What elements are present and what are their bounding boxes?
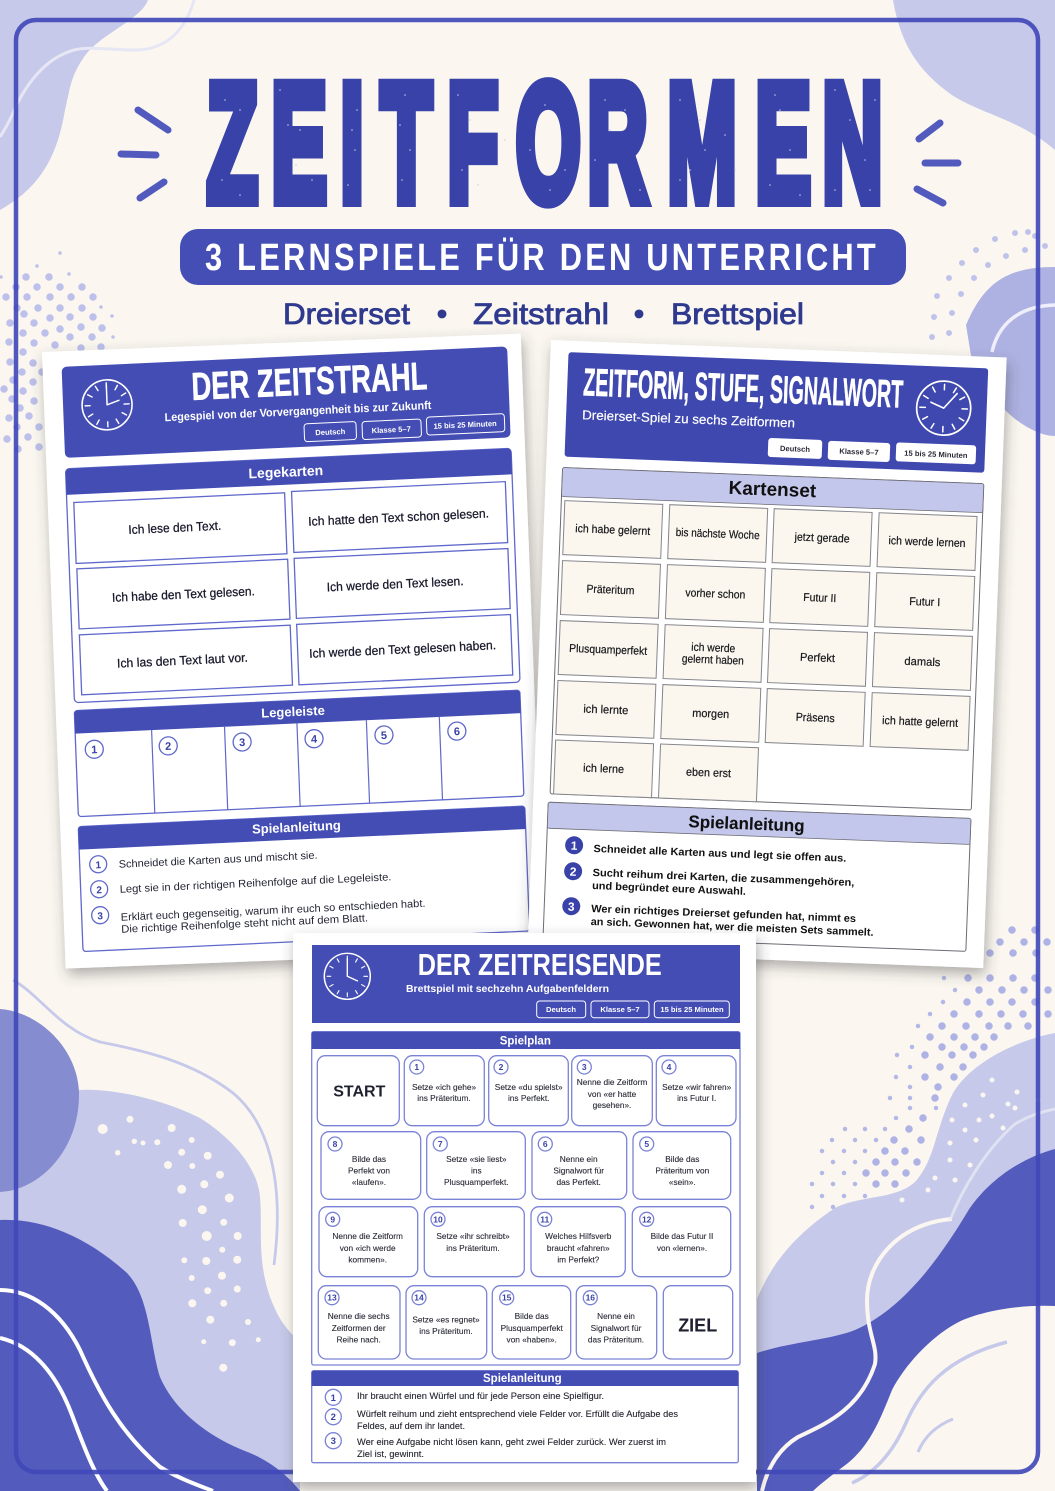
field: START: START — [333, 1084, 386, 1100]
field 4: Setze «wir fahren» — [662, 1082, 732, 1092]
field 5: «sein». — [669, 1177, 696, 1187]
instructions — [561, 836, 877, 939]
tags — [304, 414, 505, 442]
tags: 15 bis 25 Minuten — [904, 449, 968, 460]
field 11: braucht «fahren» — [547, 1243, 610, 1253]
field 12: von «lernen». — [657, 1243, 707, 1253]
field 6: Nenne ein — [560, 1154, 598, 1164]
game list: • — [437, 298, 447, 331]
game list — [283, 298, 804, 331]
field 11: Welches Hilfsverb — [545, 1231, 612, 1241]
blob: top left — [0, 0, 148, 210]
game list: • — [634, 298, 644, 331]
instructions: 3 — [331, 1436, 336, 1447]
instructions — [89, 841, 426, 937]
field 6: Signalwort für — [553, 1166, 604, 1176]
dots: top left small — [1, 253, 113, 337]
field 8 — [321, 1132, 421, 1199]
card: Ich las — [79, 625, 292, 695]
card: Perfekt: Perfekt — [800, 652, 836, 665]
instructions: Schneidet die Karten aus und mischt sie. — [119, 850, 318, 871]
field 16: Signalwort für — [591, 1323, 642, 1333]
title: ZEITFORMEN — [207, 49, 882, 235]
field 14 — [406, 1286, 487, 1359]
field 14: Setze «es regnet» — [412, 1314, 480, 1324]
dots: lower right large — [866, 930, 1048, 1184]
card: ich lernte — [556, 681, 656, 738]
card: Ich hatte: Ich hatte den Text schon gelesen. — [308, 506, 489, 529]
card: ich werde gelernt haben: gelernt haben — [682, 653, 744, 668]
sparks left — [121, 110, 168, 198]
line: lower left white two — [0, 1338, 107, 1491]
panel: Spielplan — [312, 1032, 740, 1365]
instructions: Wer ein richtiges Dreierset gefunden hat, nimmt es — [591, 903, 856, 925]
instructions: Erklärt euch gegenseitig, warum ihr euch so entschieden habt. — [121, 898, 426, 924]
field 13 — [318, 1286, 400, 1359]
field 3: gesehen». — [593, 1100, 631, 1110]
card: Ich werde gelesen haben — [297, 615, 513, 685]
card: Ich lese — [74, 493, 287, 563]
slot numbers: 5 — [381, 730, 387, 742]
sheet: Zeitform, Stufe, Signalwort — [528, 340, 1007, 968]
instructions: Würfelt reihum und zieht entsprechend viele Felder vor. Erfüllt die Aufgabe des — [357, 1409, 679, 1419]
dots: top right — [932, 232, 1045, 337]
panel: Legeleiste — [74, 690, 524, 817]
field 13: Zeitformen der — [332, 1323, 386, 1333]
field 10: 10 — [433, 1214, 443, 1224]
card: eben erst: eben erst — [686, 767, 732, 780]
sheet: Der Zeitstrahl — [42, 334, 544, 969]
title speckle — [222, 90, 875, 195]
field 7: Plusquamperfekt. — [444, 1177, 509, 1187]
tags: 15 bis 25 Minuten — [433, 419, 497, 431]
tags: Deutsch — [546, 1005, 576, 1014]
card: Ich hatte — [292, 482, 508, 552]
instructions: Ihr braucht einen Würfel und für jede Person eine Spielfigur. — [357, 1391, 604, 1401]
field 6 — [532, 1132, 627, 1199]
instructions: 1 — [570, 839, 578, 853]
slot numbers: 2 — [165, 741, 172, 753]
card: Ich habe — [77, 559, 290, 629]
card: Präsens — [765, 689, 865, 746]
subtitle banner — [180, 229, 906, 285]
line: lower left lavender — [13, 980, 277, 1265]
field 14: 14 — [414, 1293, 424, 1303]
field 9: Nenne die Zeitform — [332, 1231, 403, 1241]
subheading: Legespiel von der Vorvergangenheit bis zur Zukunft — [164, 400, 432, 424]
field 5: Bilde das — [665, 1154, 699, 1164]
dots: lower right small — [812, 978, 955, 1207]
header: Signalwort — [565, 352, 988, 473]
subheading: Dreierset-Spiel zu sechs Zeitformen — [582, 407, 795, 430]
subtitle banner: 3 LERNSPIELE FÜR DEN UNTERRICHT — [205, 236, 879, 279]
card: bis nächste Woche — [668, 505, 768, 562]
tags: Klasse 5–7 — [371, 424, 411, 435]
field 3 — [572, 1056, 652, 1126]
field 9: von «ich werde — [340, 1243, 396, 1253]
game list: Brettspiel — [671, 298, 804, 331]
field 9 — [319, 1207, 418, 1277]
field 7: 7 — [438, 1139, 443, 1149]
card: ich hatte gelernt: ich hatte gelernt — [882, 715, 959, 730]
card: Ich habe: Ich habe den Text gelesen. — [112, 584, 255, 605]
field 6: das Perfekt. — [557, 1177, 601, 1187]
field 10 — [424, 1207, 524, 1277]
blob: lower left circle — [0, 1009, 79, 1192]
field 4: ins Futur I. — [677, 1093, 716, 1103]
icon: clock — [916, 380, 972, 436]
subheading: Brettspiel mit sechzehn Aufgabenfeldern — [406, 983, 609, 995]
field 8: 8 — [333, 1139, 338, 1149]
slot numbers: 6 — [454, 726, 460, 738]
field 8: Bilde das — [352, 1154, 386, 1164]
field 12: Bilde das Futur II — [651, 1231, 713, 1241]
field 1: Setze «ich gehe» — [412, 1082, 476, 1092]
field 7: ins — [471, 1166, 482, 1176]
tags — [768, 437, 976, 465]
sheet: Der Zeitreisende — [293, 933, 756, 1482]
panel: Spielanleitung Zeitstrahl — [78, 806, 530, 952]
field 12 — [632, 1207, 731, 1277]
field 4: 4 — [667, 1062, 672, 1072]
instructions: Feldes, auf dem ihr landet. — [357, 1421, 465, 1431]
field 7: Setze «sie liest» — [446, 1154, 507, 1164]
panel: Spielanleitung Dreierset: Spielanleitung — [688, 812, 805, 836]
heading: DER ZEITREISENDE — [418, 947, 662, 982]
tags — [537, 1001, 729, 1018]
arc: right middle — [992, 305, 1055, 352]
dots: white on lower right lavender — [902, 1080, 1038, 1200]
icon: clock — [81, 379, 133, 431]
card: Plusquamperfekt — [558, 621, 658, 678]
card: Perfekt — [768, 629, 868, 686]
tags: Deutsch — [780, 444, 810, 454]
field 5: 5 — [644, 1139, 649, 1149]
card: Ich werde gelesen haben: Ich werde den Text gelesen haben. — [309, 638, 496, 661]
tags: Klasse 5–7 — [839, 447, 879, 457]
card: Plusquamperfekt: Plusquamperfekt — [569, 643, 648, 658]
field 15: 15 — [502, 1293, 512, 1303]
tags: Klasse 5–7 — [600, 1005, 640, 1014]
panel: Legeleiste: Legeleiste — [261, 703, 325, 721]
field 13: Nenne die sechs — [328, 1311, 390, 1321]
card: morgen: morgen — [692, 708, 729, 721]
field 15: Plusquamperfekt — [501, 1323, 564, 1333]
card: Ich lese: Ich lese den Text. — [128, 519, 222, 537]
field 2 — [489, 1056, 568, 1126]
field 15: Bilde das — [515, 1311, 549, 1321]
card: bis nächste Woche: bis nächste Woche — [675, 527, 760, 542]
field 4 — [656, 1056, 736, 1126]
field 16: Nenne ein — [597, 1311, 635, 1321]
instructions: 2 — [331, 1412, 336, 1423]
instructions: Schneidet alle Karten aus und legt sie offen aus. — [593, 843, 847, 865]
field 9: kommen». — [348, 1254, 387, 1264]
card: Ich werde: Ich werde den Text lesen. — [326, 574, 464, 594]
card: ich werde gelernt haben — [663, 625, 763, 682]
field: START — [317, 1056, 399, 1126]
card: ich werde lernen: ich werde lernen — [888, 535, 966, 550]
field 2: Setze «du spielst» — [495, 1082, 563, 1092]
line: lower right lavender short — [918, 1419, 953, 1452]
instructions: 2 — [96, 885, 103, 896]
card: ich lerne — [554, 740, 654, 798]
blob: right middle — [966, 267, 1055, 436]
field 14: ins Präteritum. — [419, 1326, 473, 1336]
instructions — [325, 1389, 679, 1459]
header: Zeitreisende — [312, 945, 740, 1023]
field 1: 1 — [414, 1062, 419, 1072]
panel: Spielplan: Spielplan — [500, 1036, 551, 1048]
field: ZIEL: ZIEL — [678, 1316, 717, 1336]
blob: lower right cream — [813, 1306, 1055, 1491]
card: jetzt gerade: jetzt gerade — [793, 531, 850, 546]
blob: lower left blue — [0, 1220, 300, 1491]
instructions: Die richtige Reihenfolge steht nicht auf dem Blatt. — [121, 912, 368, 936]
heading: DER ZEITSTRAHL — [191, 355, 428, 409]
panel: Kartenset: Kartenset — [728, 478, 817, 502]
blob: top right — [893, 0, 1055, 150]
field 16: das Präteritum. — [588, 1334, 644, 1344]
card: ich lerne: ich lerne — [583, 763, 624, 776]
card: Ich werde — [294, 549, 510, 618]
field 16: 16 — [586, 1293, 595, 1303]
blob: lower right blue — [757, 1149, 1055, 1491]
field 8: «laufen». — [352, 1177, 386, 1187]
slot numbers: 3 — [239, 737, 245, 749]
card: ich hatte gelernt — [870, 693, 970, 750]
field 9: 9 — [330, 1214, 335, 1224]
field 7 — [427, 1132, 525, 1199]
field 12: 12 — [642, 1214, 652, 1224]
card: Präteritum — [560, 561, 660, 618]
line: top left swirl — [0, 0, 194, 137]
field 13: 13 — [327, 1293, 337, 1303]
field 15: von «haben». — [507, 1334, 557, 1344]
card: Ich las: Ich las den Text laut vor. — [117, 651, 248, 671]
header: Zeitstrahl — [62, 346, 511, 458]
panel: Spielanleitung Brettspiel: Spielanleitung — [483, 1373, 562, 1385]
card: jetzt gerade — [772, 509, 872, 566]
field 6: 6 — [543, 1139, 548, 1149]
field 5 — [633, 1132, 731, 1199]
card: morgen — [661, 685, 761, 742]
blob: lower right lavender — [757, 1033, 1055, 1491]
instructions: Ziel ist, gewinnt. — [357, 1449, 424, 1459]
field 3: von «er hatte — [588, 1089, 637, 1099]
field 13: Reihe nach. — [337, 1334, 381, 1344]
card: ich lernte: ich lernte — [583, 704, 629, 717]
dots: white on lower left lavender — [98, 1116, 261, 1372]
line: lower left white one — [0, 1290, 213, 1491]
field 11: im Perfekt? — [557, 1254, 600, 1264]
card: Präteritum: Präteritum — [586, 584, 635, 597]
field 2: 2 — [499, 1062, 504, 1072]
instructions: an sich. Gewonnen hat, wer die meisten Sets sammelt. — [590, 916, 874, 939]
tags: 15 bis 25 Minuten — [660, 1005, 724, 1014]
sheet content: Zeitstrahl — [61, 346, 530, 952]
instructions: 2 — [569, 865, 577, 879]
card: ich werde gelernt haben: ich werde — [691, 642, 735, 655]
card: ich werde lernen — [877, 513, 977, 570]
card: damals — [872, 633, 972, 690]
game list: Dreierset — [283, 298, 411, 331]
instructions: 3 — [97, 911, 104, 922]
line: lower right faint — [950, 1109, 1055, 1220]
card: Futur I: Futur I — [909, 596, 940, 609]
instructions: 1 — [331, 1393, 337, 1404]
instructions: Legt sie in der richtigen Reihenfolge auf die Legeleiste. — [119, 871, 392, 896]
slot numbers — [85, 722, 466, 759]
field 1 — [404, 1056, 484, 1126]
card: ich habe gelernt — [563, 501, 663, 558]
panel: Spielanleitung Zeitstrahl: Spielanleitung — [252, 818, 341, 837]
slot numbers: 4 — [311, 734, 318, 746]
panel: Legekarten: Legekarten — [248, 462, 323, 481]
game list: Zeitstrahl — [473, 298, 609, 331]
slot numbers: 1 — [91, 744, 98, 756]
card: eben erst — [658, 744, 758, 802]
card: damals: damals — [904, 656, 941, 669]
tags: Deutsch — [315, 427, 346, 437]
field 8: Perfekt von — [348, 1166, 390, 1176]
icon: clock — [324, 953, 370, 999]
panel: Spielanleitung Brettspiel — [312, 1371, 738, 1463]
panel: Legekarten — [66, 448, 520, 703]
card: Futur II — [770, 569, 870, 626]
instructions: 3 — [568, 900, 575, 914]
card: vorher schon — [665, 565, 765, 622]
instructions: Wer eine Aufgabe nicht lösen kann, geht zwei Felder zurück. Wer zuerst im — [357, 1437, 666, 1447]
panel: Kartenset — [550, 468, 984, 810]
field 10: Setze «ihr schreibt» — [436, 1231, 510, 1241]
dots: top left — [4, 277, 102, 449]
blob: lower left lavender — [0, 1090, 300, 1491]
line: lower right lavender long — [852, 1342, 1007, 1483]
field 10: ins Präteritum. — [446, 1243, 500, 1253]
line: lower right white — [762, 1219, 952, 1491]
field 16 — [576, 1286, 657, 1359]
field 11: 11 — [540, 1214, 549, 1224]
field 2: ins Perfekt. — [508, 1093, 549, 1103]
field 3: 3 — [582, 1062, 587, 1072]
instructions: und begründet eure Auswahl. — [592, 880, 746, 898]
panel: Spielanleitung Dreierset — [543, 802, 971, 951]
field 1: ins Präteritum. — [417, 1093, 471, 1103]
field 11 — [531, 1207, 625, 1277]
instructions: 1 — [95, 860, 102, 871]
field 15 — [492, 1286, 571, 1359]
card: Futur I — [875, 573, 975, 630]
field: ZIEL — [663, 1286, 733, 1359]
field 5: Präteritum von — [655, 1166, 710, 1176]
card: vorher schon: vorher schon — [685, 587, 746, 602]
instructions: Sucht reihum drei Karten, die zusammengehören, — [592, 867, 855, 889]
card: Präsens: Präsens — [795, 712, 835, 725]
field 3: Nenne die Zeitform — [577, 1077, 647, 1087]
card: ich habe gelernt: ich habe gelernt — [575, 523, 651, 538]
sparks right — [917, 123, 958, 203]
card: Futur II: Futur II — [803, 592, 836, 605]
